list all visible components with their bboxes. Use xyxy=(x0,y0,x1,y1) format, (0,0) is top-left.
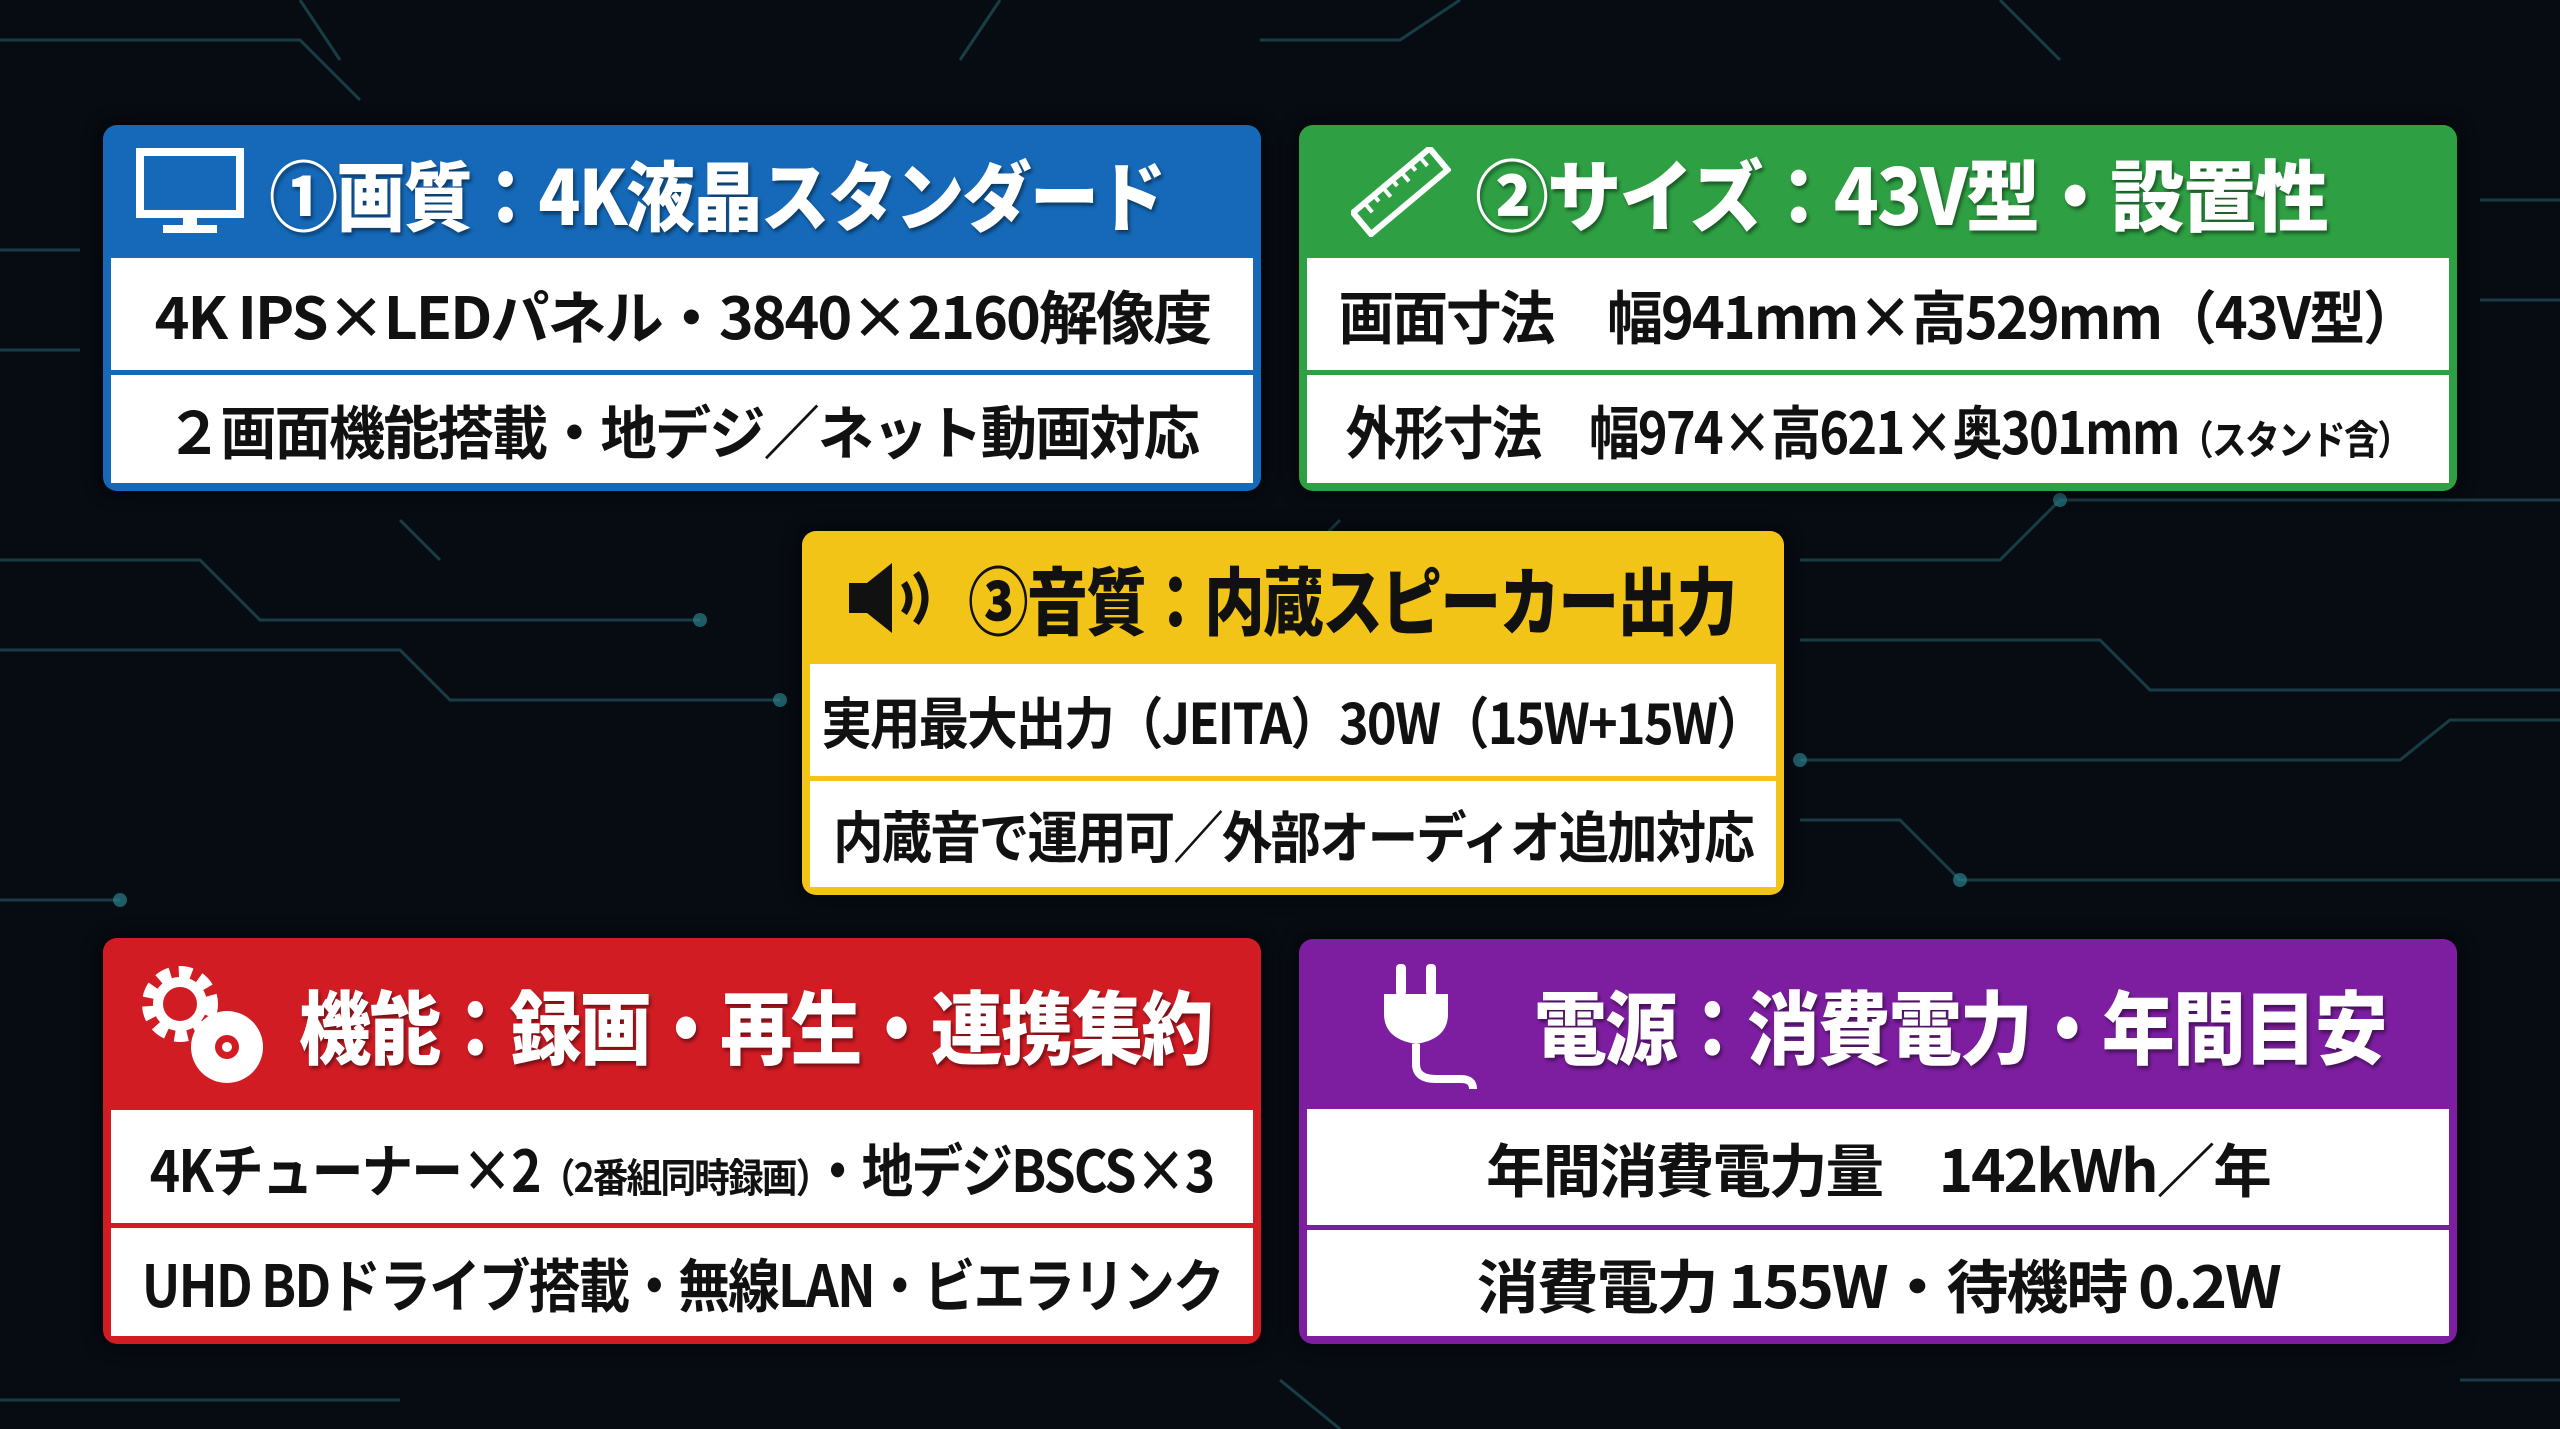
panel: size xyxy=(1299,125,2457,491)
heading: power: 電源：消費電力・年間目安 xyxy=(1534,966,2386,1082)
text: row 1: 実用最大出力（JEITA）30W（15W+15W） xyxy=(821,680,1765,760)
text: row 1: 画面寸法 幅941mm×高529mm（43V型） xyxy=(1339,272,2417,356)
text: row 2 xyxy=(1307,1230,2449,1336)
panel: picture quality xyxy=(103,125,1261,491)
icon: gear and disc xyxy=(142,966,263,1083)
panel: power xyxy=(1299,939,2457,1344)
icon: monitor xyxy=(136,148,244,233)
text: row 1 xyxy=(1307,1109,2449,1225)
heading: functions: 機能：録画・再生・連携集約 xyxy=(299,966,1212,1082)
text: row 2: 消費電力 155W・待機時 0.2W xyxy=(1477,1241,2279,1325)
text: row 2: UHD BDドライブ搭載・無線LAN・ビエラリンク xyxy=(141,1240,1223,1324)
text: row 1: 4Kチューナー×2（2番組同時録画）・地デジBSCS×3 xyxy=(150,1124,1214,1208)
text: row 1: 年間消費電力量 142kWh／年 xyxy=(1486,1125,2270,1209)
icon: ruler xyxy=(1351,147,1451,237)
icon: speaker xyxy=(849,563,929,633)
text: row 1 xyxy=(111,1110,1253,1223)
heading: picture quality: ①画質：4K液晶スタンダード xyxy=(269,136,1165,246)
icon: plug xyxy=(1384,964,1477,1089)
panel: sound xyxy=(802,531,1784,895)
heading: size: ②サイズ：43V型・設置性 xyxy=(1475,136,2327,248)
heading: sound: ③音質：内蔵スピーカー出力 xyxy=(968,544,1736,651)
text: row 2: 外形寸法 幅974×高621×奥301mm（スタンド含） xyxy=(1346,387,2410,471)
panel: functions xyxy=(103,938,1261,1344)
text: row 2: 内蔵音で運用可／外部オーディオ追加対応 xyxy=(833,794,1753,874)
text: row 1: 4K IPS×LEDパネル・3840×2160解像度 xyxy=(154,272,1210,356)
text: row 2: ２画面機能搭載・地デジ／ネット動画対応 xyxy=(166,387,1198,471)
text: row 1 xyxy=(111,258,1253,370)
